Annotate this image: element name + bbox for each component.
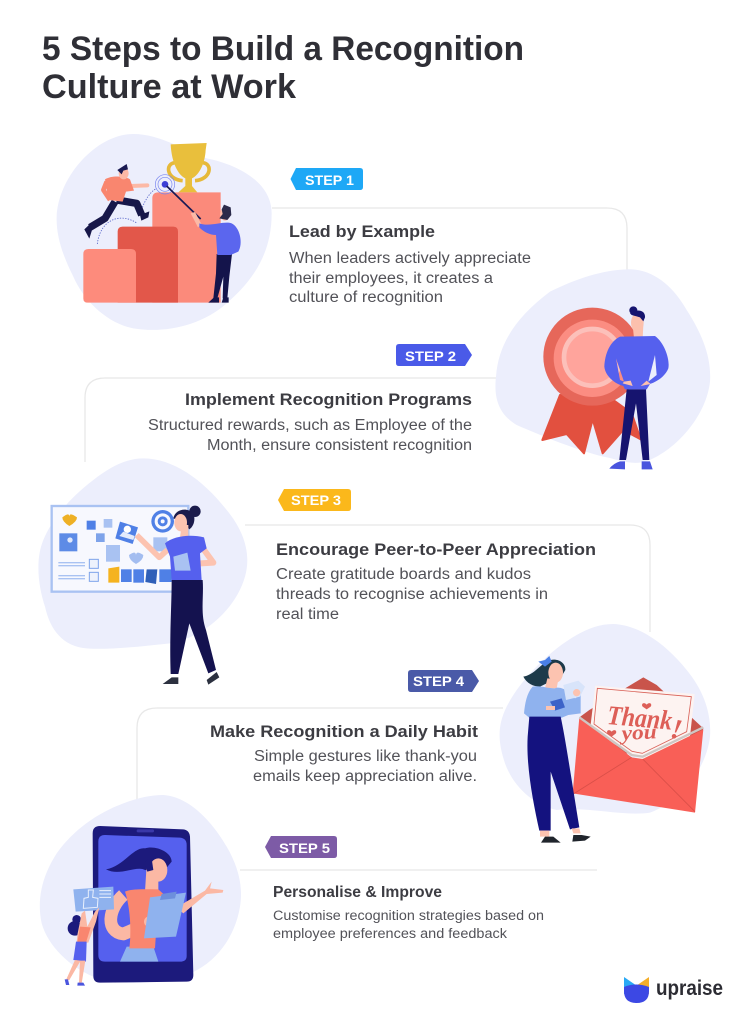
runner bbox=[84, 164, 149, 239]
step 1 badge: STEP 1 bbox=[305, 172, 354, 188]
man with pointer bbox=[191, 205, 241, 303]
step 3 badge: STEP 3 bbox=[291, 492, 341, 508]
step 3 text bbox=[276, 540, 596, 623]
step 4 text: Make Recognition a Daily Habit bbox=[210, 722, 478, 741]
step 1 text: their employees, it creates a bbox=[289, 270, 493, 287]
illustration: step 3 board and woman bbox=[38, 458, 247, 685]
step 3 text: Encourage Peer-to-Peer Appreciation bbox=[276, 540, 596, 559]
step 2 text: Month, ensure consistent recognition bbox=[207, 437, 472, 454]
step 4 text bbox=[210, 722, 478, 785]
logo: upraise bbox=[624, 977, 723, 1003]
step 4 badge: STEP 4 bbox=[413, 673, 464, 689]
step 1 text: When leaders actively appreciate bbox=[289, 250, 531, 267]
title: 5 Steps to Build a Recognition bbox=[42, 30, 524, 68]
title: Culture at Work bbox=[42, 68, 296, 106]
step 5 text bbox=[273, 884, 544, 941]
title bbox=[42, 30, 524, 106]
step 2 text: Structured rewards, such as Employee of the bbox=[148, 417, 472, 434]
step 3 text: Create gratitude boards and kudos bbox=[276, 566, 531, 583]
illustration: step 5 phone with woman bbox=[40, 795, 241, 986]
step 3 text: threads to recognise achievements in bbox=[276, 586, 548, 603]
step 4 text: Simple gestures like thank-you bbox=[254, 748, 477, 765]
step 2 badge bbox=[396, 344, 472, 366]
step 5 badge bbox=[265, 836, 337, 858]
step 3 badge bbox=[278, 489, 351, 511]
step 4 text: emails keep appreciation alive. bbox=[253, 768, 477, 785]
illustration: step 4 thank you envelope and woman: Thank bbox=[606, 700, 674, 736]
step 5 badge: STEP 5 bbox=[279, 840, 330, 856]
step 5 text: Personalise & Improve bbox=[273, 884, 442, 901]
step 1 badge bbox=[290, 168, 363, 190]
illustration: step 4 thank you envelope and woman: you bbox=[618, 721, 657, 745]
step 2 badge: STEP 2 bbox=[405, 348, 456, 364]
step 2 text bbox=[148, 390, 472, 454]
step 1 text: Lead by Example bbox=[289, 222, 435, 241]
step 5 text: employee preferences and feedback bbox=[273, 926, 507, 941]
step 3 text: real time bbox=[276, 606, 339, 623]
illustration: step 1 podium and trophy bbox=[57, 134, 272, 330]
illustration: step 4 thank you envelope and woman: ! bbox=[668, 714, 684, 746]
step 1 text: culture of recognition bbox=[289, 289, 443, 306]
illustration: step 2 medal and man bbox=[495, 269, 710, 469]
step 1 text bbox=[289, 222, 531, 306]
illustration: step 4 thank you envelope and woman bbox=[500, 624, 710, 843]
step 4 badge bbox=[408, 670, 479, 692]
step 5 text: Customise recognition strategies based on bbox=[273, 908, 544, 923]
logo: upraise: upraise bbox=[656, 977, 723, 1000]
step 2 text: Implement Recognition Programs bbox=[185, 390, 472, 409]
